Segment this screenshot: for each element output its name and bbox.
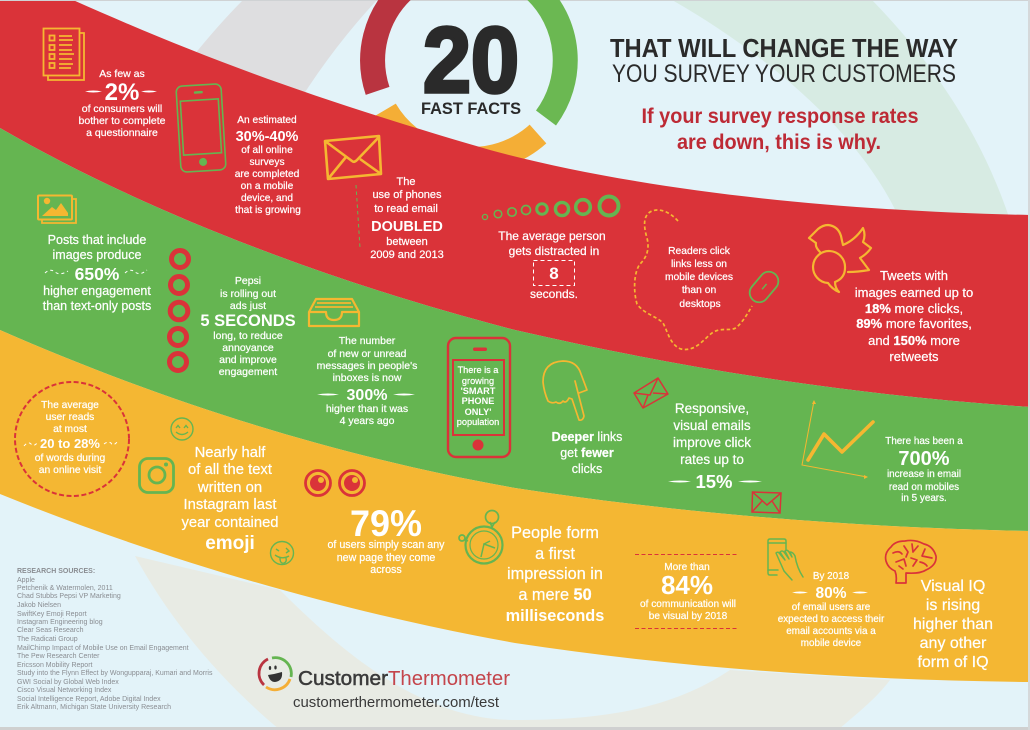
chart: rising line bbox=[802, 400, 873, 479]
fact: 80% by 2018: expected to access their bbox=[778, 614, 885, 625]
fact: deeper links: clicks bbox=[572, 462, 602, 476]
fact: 30%-40% on mobile: 30%-40% bbox=[236, 129, 299, 145]
fact: 700% increase: 700% bbox=[898, 448, 950, 470]
research sources: Erik Altmann, Michigan State University Research bbox=[17, 704, 171, 711]
fact: tweets with images: 89% more favorites, bbox=[856, 316, 972, 331]
fact: 700% increase: There has been a bbox=[885, 436, 963, 447]
icon: pointing hand bbox=[543, 361, 587, 420]
fact: 300% unread messages: The number bbox=[339, 335, 396, 347]
fact: 20 to 28% of words: 20 to 28% bbox=[40, 436, 100, 451]
fact: 30%-40% on mobile: that is growing bbox=[235, 205, 301, 216]
fact: visual iq: Visual IQ bbox=[921, 578, 985, 595]
fact: responsive emails: improve click bbox=[673, 435, 751, 450]
fact: pepsi 5 seconds: 5 SECONDS bbox=[200, 312, 296, 330]
url: customerthermometer.com/test bbox=[293, 695, 499, 711]
research sources: MailChimp Impact of Mobile Use on Email Engagement bbox=[17, 645, 189, 652]
band: yellow bbox=[0, 330, 1030, 682]
fact: visual iq: is rising bbox=[926, 597, 980, 614]
heading: THAT WILL CHANGE THE WAY bbox=[610, 33, 958, 63]
research sources: The Pew Research Center bbox=[17, 653, 100, 660]
icon: inbox tray bbox=[309, 299, 359, 326]
fact: pepsi 5 seconds: Pepsi bbox=[235, 275, 261, 287]
research sources: SwiftKey Emoji Report bbox=[17, 611, 87, 618]
fact: email doubled: DOUBLED bbox=[371, 219, 443, 235]
fact: email doubled: to read email bbox=[374, 203, 438, 215]
fact: 79% scan: new page they come bbox=[337, 552, 435, 564]
icon: brain bbox=[886, 540, 936, 583]
fact: deeper links: get fewer bbox=[560, 446, 614, 460]
research sources: Cisco Visual Networking Index bbox=[17, 687, 112, 694]
research sources: Apple bbox=[17, 577, 35, 584]
fact: visual iq: higher than bbox=[913, 616, 993, 633]
gauge ring yellow segment bbox=[385, 110, 538, 159]
research sources: Instagram Engineering blog bbox=[17, 619, 103, 626]
fact: readers click less: links less on bbox=[671, 259, 727, 270]
fact: distracted in 8 seconds: 8 bbox=[549, 264, 559, 283]
fact: 30%-40% on mobile: device, and bbox=[241, 193, 293, 204]
fact: 20 to 28% of words: an online visit bbox=[39, 465, 101, 476]
icon: bird bbox=[809, 225, 871, 292]
fact: deeper links bbox=[552, 430, 622, 476]
fact: 20 to 28% of words bbox=[15, 382, 129, 496]
band: red bbox=[0, 0, 1030, 407]
fact: posts with images: images produce bbox=[53, 248, 142, 262]
fact: responsive emails bbox=[668, 401, 762, 492]
fact: 30%-40% on mobile: surveys bbox=[249, 157, 285, 168]
title: 20 fast facts: FAST FACTS bbox=[421, 100, 521, 118]
fact: 80% by 2018: 80% bbox=[815, 585, 847, 602]
icon: shrinking green rings bbox=[482, 196, 618, 220]
fact: 300% unread messages: of new or unread bbox=[328, 348, 407, 360]
fact: distracted in 8 seconds: seconds. bbox=[530, 287, 578, 301]
fact: email doubled: The bbox=[397, 176, 415, 188]
fact: readers click less: desktops bbox=[679, 299, 721, 310]
fact: pepsi 5 seconds bbox=[200, 275, 296, 378]
fact: 700% increase: read on mobiles bbox=[889, 482, 959, 493]
fact: first impression: People form bbox=[511, 524, 599, 542]
fact: instagram emoji: written on bbox=[197, 480, 262, 496]
research sources: GWI Social by Global Web Index bbox=[17, 679, 119, 686]
fact: distracted in 8 seconds: gets distracted in bbox=[509, 244, 599, 258]
fact: tweets with images: retweets bbox=[889, 349, 939, 364]
icon and fact: smartphone only: There is a bbox=[458, 365, 499, 375]
icon: yellow envelope bbox=[325, 136, 381, 179]
fact: responsive emails: rates up to bbox=[680, 452, 744, 467]
fact: responsive emails: visual emails bbox=[673, 418, 751, 433]
fact: 300% unread messages: 300% bbox=[347, 387, 387, 404]
fact: visual iq: form of IQ bbox=[917, 654, 989, 671]
fact: pepsi 5 seconds: and improve bbox=[219, 354, 277, 366]
research sources: RESEARCH SOURCES: bbox=[17, 568, 95, 575]
fact: pepsi 5 seconds: is rolling out bbox=[220, 288, 276, 300]
icon: small red envelope bbox=[752, 492, 781, 513]
fact: pepsi 5 seconds: engagement bbox=[219, 366, 277, 378]
fact: tweets with images bbox=[855, 268, 973, 364]
logo: customer thermometer: Thermometer bbox=[388, 668, 510, 690]
research sources: Jakob Nielsen bbox=[17, 602, 61, 609]
fact: visual iq: any other bbox=[920, 635, 987, 652]
fact: 2% of consumers: bother to complete bbox=[79, 115, 166, 127]
icon: hand on phone bbox=[768, 539, 803, 580]
fact: first impression: milliseconds bbox=[506, 607, 604, 625]
fact: 20 to 28% of words: at most bbox=[53, 424, 87, 435]
fact: distracted in 8 seconds: The average person bbox=[498, 229, 606, 243]
gauge ring red and green arcs bbox=[373, 0, 565, 118]
fact: 30%-40% on mobile bbox=[235, 115, 301, 216]
fact: email doubled bbox=[370, 176, 444, 261]
fact: 84% visual: of communication will bbox=[640, 599, 736, 610]
fact: 700% increase: in 5 years. bbox=[901, 493, 947, 504]
fact: email doubled: between bbox=[386, 236, 428, 248]
icon and fact: smartphone only: PHONE bbox=[462, 396, 494, 406]
fact: 84% visual: 84% bbox=[661, 570, 713, 600]
fact: 20 to 28% of words: of words during bbox=[35, 453, 105, 464]
research sources: Petchenik & Watermolen, 2011 bbox=[17, 585, 113, 592]
fact: 20 to 28% of words: The average bbox=[41, 400, 99, 411]
heading: YOU SURVEY YOUR CUSTOMERS bbox=[612, 60, 956, 88]
research sources: The Radicati Group bbox=[17, 636, 78, 643]
fact: 300% unread messages: higher than it was bbox=[326, 403, 408, 415]
fact: 80% by 2018: email accounts via a bbox=[786, 626, 876, 637]
fact: 84% visual: be visual by 2018 bbox=[649, 611, 728, 622]
fact: instagram emoji: year contained bbox=[181, 515, 279, 531]
heading bbox=[610, 33, 958, 88]
research sources: Chad Stubbs Pepsi VP Marketing bbox=[17, 593, 121, 600]
icon: images bbox=[38, 196, 76, 223]
icon: instagram bbox=[140, 458, 174, 492]
fact: pepsi 5 seconds: ads just bbox=[230, 300, 266, 312]
fact: 80% by 2018 bbox=[778, 571, 885, 649]
fact: 84% visual: More than bbox=[664, 562, 710, 573]
logo: customer thermometer bbox=[259, 658, 510, 690]
fact: 30%-40% on mobile: are completed bbox=[235, 169, 300, 180]
fact: instagram emoji bbox=[181, 445, 279, 554]
icon: red eyes bbox=[306, 470, 364, 496]
fact: posts with images: higher engagement bbox=[43, 284, 151, 298]
fact: 2% of consumers: As few as bbox=[99, 68, 145, 80]
fact: 30%-40% on mobile: of all online bbox=[241, 145, 293, 156]
research sources bbox=[17, 568, 213, 711]
fact: tweets with images: and 150% more bbox=[868, 333, 960, 348]
title: 20 fast facts: 20 bbox=[423, 8, 519, 112]
fact: readers click less: mobile devices bbox=[665, 272, 733, 283]
fact: readers click less: Readers click bbox=[668, 246, 731, 257]
fact: 30%-40% on mobile: An estimated bbox=[237, 115, 297, 126]
icon: mouse bbox=[746, 268, 782, 306]
fact: distracted in 8 seconds bbox=[498, 229, 606, 301]
fact: tweets with images: 18% more clicks, bbox=[865, 301, 963, 316]
fact: visual iq bbox=[913, 578, 993, 671]
fact: tweets with images: images earned up to bbox=[855, 285, 973, 300]
icon and fact: smartphone only: 'SMART bbox=[461, 386, 496, 396]
fact: 84% visual bbox=[635, 554, 739, 628]
fact: first impression: a mere 50 bbox=[518, 586, 592, 604]
fact: first impression: a first bbox=[535, 545, 575, 563]
icon: tilted red envelope bbox=[634, 378, 668, 408]
fact: responsive emails: 15% bbox=[695, 471, 733, 492]
fact: 300% unread messages: 4 years ago bbox=[340, 415, 395, 427]
fact: 79% scan bbox=[327, 503, 445, 576]
icon: red donuts bbox=[170, 250, 188, 370]
fact: 2% of consumers: a questionnaire bbox=[86, 127, 158, 139]
icon: dashed mouse cable bbox=[635, 210, 752, 349]
research sources: Clear Seas Research bbox=[17, 627, 84, 634]
fact: first impression: impression in bbox=[507, 565, 603, 583]
fact: 79% scan: 79% bbox=[350, 503, 422, 544]
fact: posts with images bbox=[43, 233, 151, 313]
icon and fact: smartphone only: population bbox=[457, 417, 499, 427]
fact: readers click less bbox=[665, 246, 733, 310]
fact: 300% unread messages: inboxes is now bbox=[333, 372, 402, 384]
fact: 80% by 2018: By 2018 bbox=[813, 571, 850, 582]
fact: 30%-40% on mobile: on a mobile bbox=[241, 181, 294, 192]
subheading: are down, this is why. bbox=[677, 131, 881, 154]
fact: 79% scan: of users simply scan any bbox=[327, 539, 445, 551]
fact: 20 to 28% of words: user reads bbox=[46, 412, 94, 423]
fact: email doubled: 2009 and 2013 bbox=[370, 249, 444, 261]
fact: instagram emoji: Instagram last bbox=[184, 497, 276, 513]
fact: posts with images: 650% bbox=[75, 264, 120, 284]
research sources: Social Intelligence Report, Adobe Digital Index bbox=[17, 696, 161, 703]
fact: responsive emails: Responsive, bbox=[675, 401, 749, 416]
fact: 700% increase: increase in email bbox=[887, 469, 961, 480]
fact: 80% by 2018: mobile device bbox=[801, 638, 862, 649]
fact: instagram emoji: emoji bbox=[205, 533, 255, 554]
fact: deeper links: Deeper links bbox=[552, 430, 622, 444]
band: green bbox=[0, 128, 1030, 531]
icon and fact: smartphone only bbox=[448, 338, 510, 457]
logo: customer thermometer: Customer bbox=[298, 668, 388, 690]
fact: tweets with images: Tweets with bbox=[880, 268, 948, 283]
fact: 80% by 2018: of email users are bbox=[792, 602, 871, 613]
fact: instagram emoji: Nearly half bbox=[195, 445, 266, 461]
icon: smile emoji bbox=[171, 418, 193, 440]
icon: tongue emoji bbox=[270, 542, 294, 564]
fact: pepsi 5 seconds: annoyance bbox=[222, 342, 274, 354]
icon: document list bbox=[44, 28, 84, 80]
fact: 2% of consumers: of consumers will bbox=[82, 103, 162, 115]
fact: 700% increase bbox=[885, 436, 963, 504]
icon: green phone bbox=[176, 84, 226, 172]
fact: posts with images: Posts that include bbox=[48, 233, 146, 247]
fact: 300% unread messages: messages in people's bbox=[317, 360, 417, 372]
icon and fact: smartphone only: growing bbox=[462, 376, 494, 386]
research sources: Study into the Flynn Effect by Wongupparaj, Kumari and Morris bbox=[17, 670, 213, 677]
subheading bbox=[642, 105, 918, 154]
fact: posts with images: than text-only posts bbox=[43, 299, 151, 313]
fact: 300% unread messages bbox=[317, 335, 417, 427]
subheading: If your survey response rates bbox=[642, 105, 918, 128]
fact: readers click less: than on bbox=[682, 285, 716, 296]
fact: 2% of consumers bbox=[79, 68, 166, 139]
fact: 2% of consumers: 2% bbox=[105, 79, 139, 106]
icon: stopwatch bbox=[459, 510, 502, 564]
fact: pepsi 5 seconds: long, to reduce bbox=[213, 330, 283, 342]
icon and fact: smartphone only: ONLY' bbox=[465, 407, 491, 417]
fact: 79% scan: across bbox=[370, 564, 402, 576]
fact: email doubled: use of phones bbox=[372, 189, 442, 201]
research sources: Ericsson Mobility Report bbox=[17, 662, 93, 669]
fact: first impression bbox=[506, 524, 604, 625]
fact: instagram emoji: of all the text bbox=[188, 462, 272, 478]
